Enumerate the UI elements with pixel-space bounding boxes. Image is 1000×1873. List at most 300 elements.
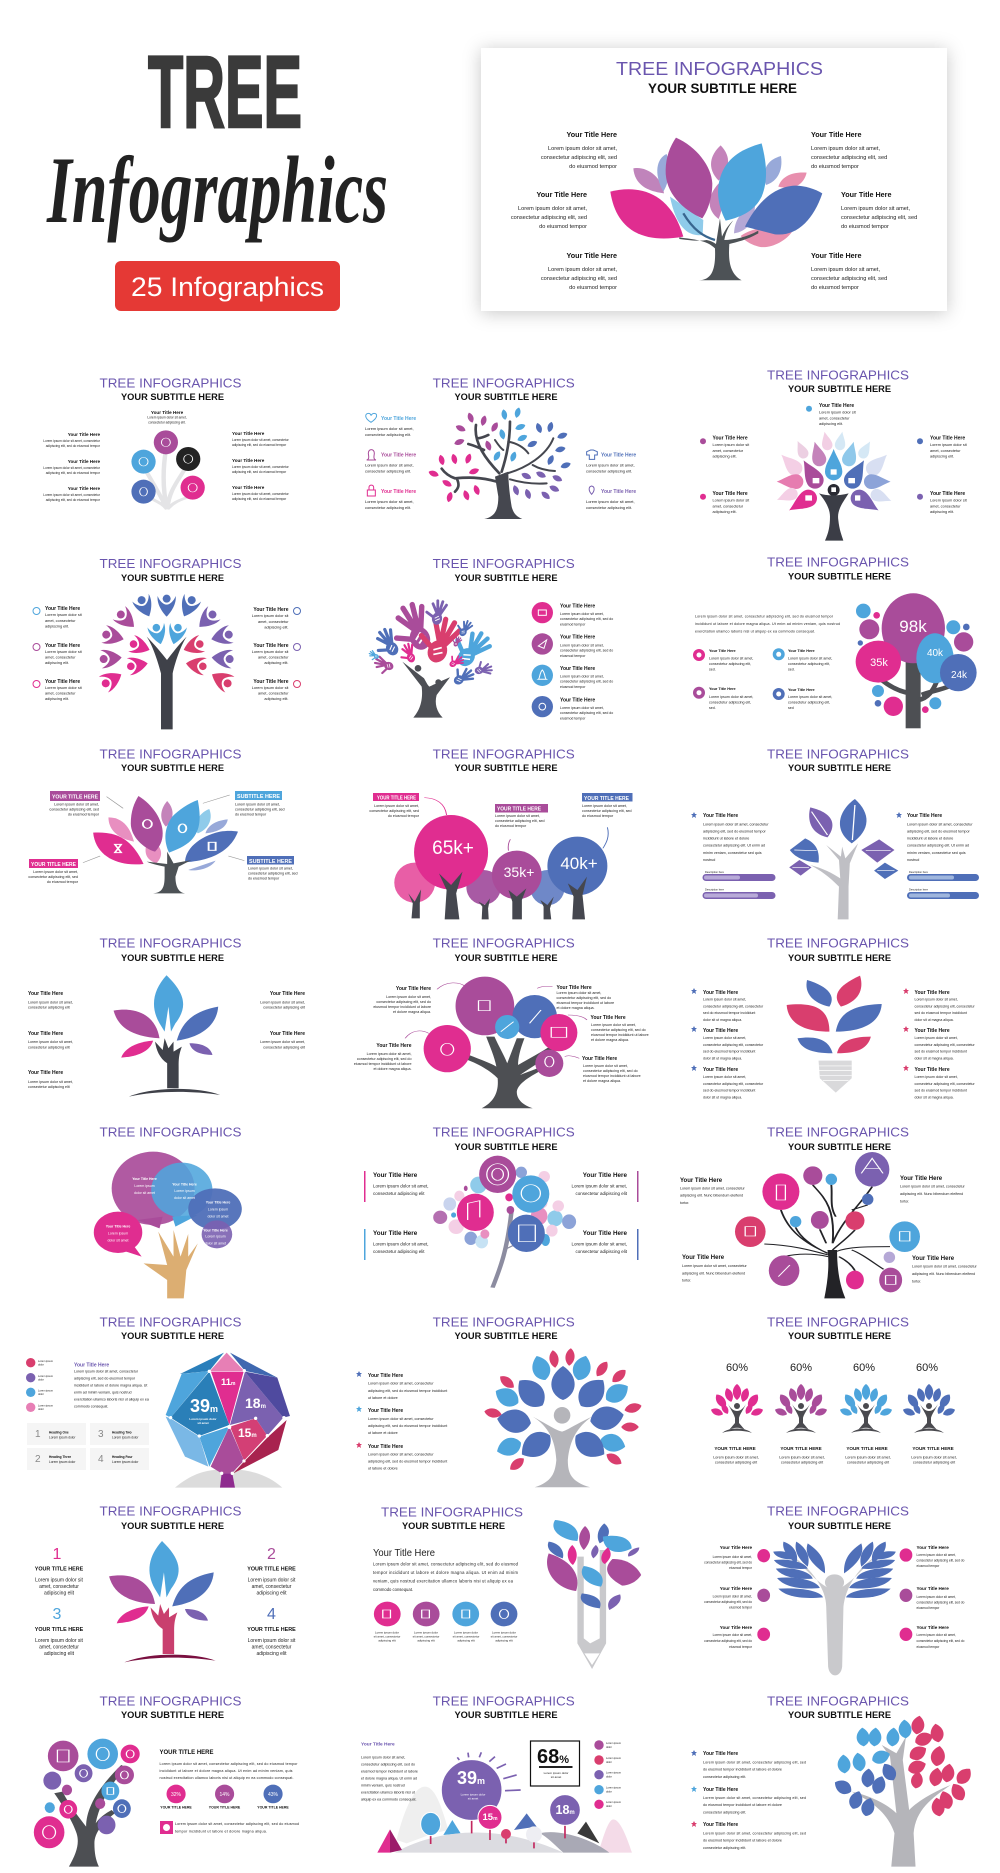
text: Your Title Here (914, 990, 950, 996)
dots (700, 406, 923, 500)
text: eiusmod tempor (916, 1564, 940, 1568)
text: consectetur adipiscing elit (28, 1085, 70, 1089)
text: Your Title Here (916, 1545, 949, 1550)
text: consectetur adipiscing elit. (703, 1846, 746, 1850)
text: Lorem ipsum dolor (492, 1630, 516, 1634)
panel: row 5 column 3 black tree (680, 1124, 978, 1298)
text: do eiusmod tempor (68, 812, 100, 816)
polygon tree (166, 1353, 290, 1488)
tree (832, 1715, 975, 1867)
panel: row 8 column 3 gray tree with petals: TREE INFOGRAPHICS (767, 1694, 909, 1708)
text: Lorem ipsum dolor sit (252, 686, 289, 690)
featured text right: Your Title Here (811, 130, 861, 139)
labels: YOUR TITLE HERE (31, 862, 76, 868)
text: Your Title Here (703, 1751, 738, 1757)
balloons (131, 430, 205, 509)
text block: consectetur adipiscing elit, sed do (361, 1762, 415, 1766)
text: YOUR TITLE HERE (35, 1566, 84, 1572)
text: amet, consectetur (39, 1584, 79, 1590)
text: et dolore magna aliqua. (393, 1010, 431, 1014)
panel: row 1 column 1 balloon tree (43, 376, 290, 509)
text: adipiscing elit, sed do eiusmod tempor (703, 830, 766, 834)
text: tortor. (900, 1200, 909, 1204)
panel: row 2 column 2 hand tree (367, 556, 613, 720)
landscape values: Lorem ipsum dolor (461, 1792, 485, 1796)
text block: Lorem ipsum dolor sit amet, consectetur (74, 1370, 139, 1374)
text: Lorem ipsum dolor sit (45, 686, 83, 690)
text: Lorem ipsum dolor sit amet, consectetur (43, 466, 101, 470)
text: consectetur adipiscing elit (263, 1006, 305, 1010)
panel: row 6 column 2 figure tree (356, 1315, 643, 1487)
panel: row 1 column 1 balloon tree: TREE INFOGRAPHICS (100, 376, 242, 390)
text: Lorem ipsum dolor sit amet, (713, 1633, 752, 1637)
text: adipiscing elit (44, 1651, 75, 1657)
panel: row 3 column 3 veined leaves: TREE INFOGRAPHICS (767, 746, 909, 762)
text: Lorem ipsum dolor (454, 1630, 478, 1634)
text: Your Title Here (930, 491, 965, 497)
text: Lorem ipsum dolor (414, 1630, 438, 1634)
text: YOUR TITLE HERE (780, 1446, 822, 1451)
text: Lorem ipsum dolor sit amet, (560, 674, 604, 678)
legend: dolor (606, 1804, 612, 1808)
text: Lorem ipsum dolor sit amet, (28, 1000, 73, 1004)
bubble values: 35k (870, 657, 888, 669)
text (28, 991, 305, 1089)
text: adipiscing elit, sed do eiusmod tempor (46, 498, 101, 502)
text: adipiscing elit, sed do eiusmod tempor (232, 470, 287, 474)
panel: row 6 column 2 figure tree: YOUR SUBTITLE HERE (454, 1331, 558, 1342)
bubble text: Lorem ipsum (205, 1234, 226, 1238)
stars (356, 1371, 362, 1448)
text: Lorem ipsum dolor sit (712, 443, 750, 447)
text: sed do eiusmod tempor incididunt (703, 1050, 755, 1054)
featured text left (511, 130, 617, 291)
text: Lorem ipsum dolor sit (819, 410, 857, 414)
text: consectetur adipiscing elit, sed do (704, 1639, 752, 1643)
text (28, 802, 298, 884)
text: dolor sit ut magna aliqua. (914, 1018, 954, 1022)
featured text left: Lorem ipsum dolor sit amet, (548, 267, 617, 273)
text: adipiscing elit. Nunc bibendum eleifend (912, 1272, 975, 1276)
panel: row 6 column 1 polygon tree (26, 1315, 290, 1488)
text: consectetur adipiscing elit. Ut enim ad (703, 844, 765, 848)
text: veniam, quis nostrud exercitation ullamco laboris nisi ut aliquip ex ea (373, 1578, 514, 1584)
text: sed do eiusmod tempor incididunt (703, 1088, 755, 1092)
legend: Lorem ipsum (606, 1756, 621, 1760)
text: adipiscing elit, sed do eiusmod tempor (907, 830, 970, 834)
text: adipiscing elit. (930, 454, 954, 458)
panel: row 3 column 1 labelled leaves (28, 746, 298, 893)
heading cards: 1 (35, 1429, 41, 1440)
heading: Infographics script: Infographics (46, 137, 388, 243)
panel: row 5 column 1 speech bubbles: TREE INFOGRAPHICS (100, 1124, 242, 1140)
panel: row 2 column 3 bubble tree (693, 555, 977, 728)
tree with bubbles (856, 593, 977, 728)
panel: row 6 column 3 four mini trees (710, 1315, 957, 1464)
text: ut labore et dolore (368, 1396, 398, 1400)
text: eiusmod tempor incididunt ut labore (354, 1062, 412, 1066)
legend: Lorem ipsum (38, 1359, 53, 1363)
text block: adipiscing elit, sed do eiusmod tempor (74, 1376, 136, 1380)
text: amet, consectetur (930, 449, 961, 453)
landscape values: 39m (457, 1768, 485, 1788)
bubble values (870, 617, 968, 681)
text: do eiusmod tempor incididunt ut labore et dolore (703, 1838, 782, 1842)
text: Your Title Here (381, 416, 416, 422)
panel: row 8 column 1 icon branches: TREE INFOGRAPHICS (100, 1694, 242, 1708)
text (703, 813, 973, 892)
text: eiusmod tempor (560, 716, 586, 720)
text: Lorem ipsum dolor sit amet, consectetur adipiscing elit, sed (703, 1760, 806, 1764)
bubble text (106, 1177, 230, 1246)
text: consectetur adipiscing elit (263, 1046, 305, 1050)
text: consectetur adipiscing elit, consectetur (914, 1082, 975, 1086)
text: tempor incididunt ut labore et dolore magna aliqua. Ut enim ad minim (373, 1570, 518, 1575)
stat box 68% (530, 1741, 580, 1786)
bubble text: dolor sit amet (205, 1242, 226, 1246)
text (369, 804, 632, 828)
text: do eiusmod tempor (235, 812, 267, 816)
text: Lorem ipsum dolor sit amet, (713, 1594, 752, 1598)
text: nostrud (907, 858, 919, 862)
text: consectetur adipiscing elit, sed (235, 808, 285, 812)
legend: dolor (38, 1378, 44, 1382)
footer note (160, 1821, 299, 1834)
panel: row 7 column 2 pencil tree: TREE INFOGRAPHICS (381, 1504, 523, 1520)
legend: dolor (606, 1760, 612, 1764)
icon list (532, 602, 553, 717)
text: Your Title Here (601, 452, 636, 458)
bubble text: Your Title Here (203, 1228, 228, 1232)
heading cards: 3 (98, 1429, 104, 1440)
tree (98, 593, 236, 729)
text: eiusmod tempor incididunt ut labore (591, 1033, 649, 1037)
text (680, 1176, 978, 1284)
badge: 25 Infographics (115, 261, 340, 311)
text: Lorem ipsum dolor (375, 1630, 399, 1634)
text: adipiscing elit. (264, 697, 288, 701)
text (35, 1566, 296, 1657)
text: sed (788, 706, 794, 710)
labels (29, 791, 294, 868)
text: Your Title Here (253, 679, 289, 685)
text: Lorem ipsum dolor sit amet, (373, 1242, 429, 1246)
heading cards: Heading One (49, 1430, 69, 1434)
legend: dolor (606, 1774, 612, 1778)
text block: exercitation ullamco laboris nisi ut (361, 1790, 415, 1794)
text: Lorem ipsum dolor sit amet, (713, 1456, 759, 1460)
panel: row 8 column 3 gray tree with petals (691, 1694, 975, 1867)
tree (405, 977, 587, 1108)
featured text right: Lorem ipsum dolor sit amet, (811, 267, 880, 273)
percent labels: 60% (790, 1362, 812, 1374)
text: do eiusmod tempor incididunt ut labore et dolore (703, 1803, 782, 1807)
bubble values: 24k (951, 670, 968, 681)
text: Lorem ipsum dolor sit (248, 1638, 296, 1644)
text block: et dolore magna aliqua. Ut enim ad (361, 1776, 417, 1780)
text: amet, consectetur (258, 656, 289, 660)
text: Your Title Here (709, 687, 736, 691)
text: eiusmod tempor (560, 654, 586, 658)
text: Your Title Here (373, 1547, 435, 1559)
featured text right: Lorem ipsum dolor sit amet, (811, 146, 880, 152)
text: Lorem ipsum dolor sit amet, (260, 1040, 305, 1044)
text: do eiusmod tempor (47, 880, 79, 884)
text: consectetur adipiscing elit (373, 1191, 425, 1196)
labels (373, 793, 632, 812)
panel: row 5 column 2 bubble crown: TREE INFOGRAPHICS (433, 1124, 575, 1140)
panel: row 4 column 2 icon tree (354, 936, 649, 1108)
text: Lorem ipsum dolor sit amet, (788, 695, 832, 699)
text: Lorem ipsum dolor sit amet, (571, 1184, 627, 1188)
text: Your Title Here (788, 649, 815, 653)
text: Your Title Here (583, 1172, 627, 1179)
panel: row 8 column 2 landscape stats (361, 1694, 632, 1853)
text: Lorem ipsum dolor sit amet, (365, 499, 414, 504)
text: eiusmod tempor (560, 685, 586, 689)
text: Lorem ipsum dolor sit amet, (916, 1553, 956, 1557)
panel: row 1 column 2 leafy tree (365, 376, 636, 519)
tree (433, 1156, 576, 1288)
blobs (374, 1602, 517, 1626)
text block: YOUR TITLE HERE (160, 1750, 214, 1756)
text: Lorem ipsum dolor sit amet, (374, 804, 419, 808)
text: adipiscing elit, sed do eiusmod tempor (46, 444, 101, 448)
text: consectetur adipiscing elit. (586, 505, 632, 510)
text (368, 1373, 447, 1470)
text: YOUR TITLE HERE (912, 1446, 954, 1451)
text: tortor. (680, 1201, 689, 1205)
tree (735, 1152, 920, 1298)
text: amet, consectetur (930, 504, 961, 508)
text: consectetur adipiscing elit. (586, 468, 632, 474)
panel: row 3 column 2 forest values (369, 746, 632, 919)
panel: row 5 column 3 black tree: TREE INFOGRAPHICS (767, 1124, 909, 1140)
text: Lorem ipsum dolor sit amet, consectetur adipiscing elit, sed (703, 1796, 806, 1800)
text: consectetur adipiscing elit, (709, 700, 751, 704)
text: consectetur adipiscing elit, (709, 662, 751, 666)
outline icons (366, 413, 597, 496)
text: adipiscing elit. (712, 454, 737, 458)
text: YOUR TITLE HERE (247, 1627, 296, 1633)
text: consectetur adipiscing elit, consectetur (703, 1004, 764, 1008)
text: consectetur adipiscing elit, sed do (583, 1069, 638, 1073)
text: Lorem ipsum dolor sit amet, consectetur (232, 492, 290, 496)
text: amet, consectetur (252, 1644, 292, 1650)
labels: YOUR TITLE HERE (497, 806, 541, 812)
text: adipiscing elit. Nunc bibendum eleifend (680, 1194, 743, 1198)
tree (428, 407, 572, 519)
panel: row 5 column 3 black tree: YOUR SUBTITLE HERE (788, 1142, 891, 1153)
text: Lorem ipsum dolor sit (35, 1578, 84, 1584)
labels: SUBTITLE HERE (249, 859, 292, 865)
bubble text: Your Title Here (132, 1177, 157, 1181)
text: sed do eiusmod tempor incididunt (914, 1050, 967, 1054)
text: dolor sit ut magna aliqua. (703, 1018, 742, 1022)
panel: row 3 column 2 forest values: TREE INFOGRAPHICS (433, 746, 575, 762)
text: Your Title Here (709, 649, 736, 653)
text: Your Title Here (68, 459, 100, 464)
labels: YOUR TITLE HERE (377, 796, 416, 802)
panel: row 7 column 1 numbered hand tree (35, 1504, 296, 1662)
text: Your Title Here (28, 991, 63, 997)
panel: row 4 column 1 hand leaves: YOUR SUBTITLE HERE (121, 953, 224, 964)
text: Lorem ipsum dolor sit amet, consectetur (43, 493, 101, 497)
text: do eiusmod tempor (388, 814, 420, 818)
trees (394, 798, 608, 919)
text: Your Title Here (582, 1056, 617, 1062)
text: Lorem ipsum dolor sit amet, (583, 1064, 628, 1068)
text: consectetur adipiscing elit. (703, 1810, 746, 1814)
panel: row 7 column 3 person tree: TREE INFOGRAPHICS (767, 1504, 909, 1518)
bubble text: Your Title Here (106, 1224, 130, 1228)
legend: Lorem ipsum (606, 1800, 621, 1804)
text (43, 410, 290, 502)
text: Your Title Here (703, 990, 738, 996)
text: consectetur adipiscing elit, (788, 662, 830, 666)
featured text left: Lorem ipsum dolor sit amet, (548, 146, 617, 152)
text: Lorem ipsum dolor sit amet, (703, 1075, 746, 1079)
text: Description here (909, 888, 928, 892)
featured text right: consectetur adipiscing elit, sed (811, 276, 887, 282)
text: Lorem ipsum dolor sit amet, (560, 706, 604, 710)
text: sed do eiusmod tempor incididunt (914, 1011, 967, 1015)
text: eiusmod tempor incididunt ut labore (583, 1074, 641, 1078)
text: amet, consectetur (258, 620, 289, 624)
text: consectetur adipiscing elit, sed (248, 872, 298, 876)
percent labels: 60% (853, 1362, 875, 1374)
panel: row 8 column 1 icon branches: YOUR SUBTITLE HERE (121, 1710, 224, 1721)
landscape values: 18m (556, 1803, 575, 1817)
text: consectetur adipiscing elit, sed do (916, 1639, 965, 1643)
text: amet, consectetur (45, 692, 76, 696)
legend: Lorem ipsum (606, 1786, 621, 1790)
text block: exercitation ullamco laboris nisi ut aliquip ex ea (74, 1398, 149, 1402)
text: Your Title Here (560, 604, 595, 610)
text: Lorem ipsum dolor sit amet, (591, 1023, 636, 1027)
text: consectetur adipiscing elit, (788, 700, 830, 704)
text: Lorem ipsum dolor sit amet, (586, 462, 635, 468)
text block: commodo consequat. (74, 1404, 108, 1408)
text: Your Title Here (720, 1586, 752, 1591)
panel: row 6 column 3 four mini trees: TREE INFOGRAPHICS (767, 1315, 909, 1330)
landscape (377, 1752, 632, 1853)
panel: row 1 column 2 leafy tree: TREE INFOGRAPHICS (433, 376, 575, 390)
featured text right: Lorem ipsum dolor sit amet, (841, 206, 910, 212)
panel: featured slide (481, 48, 947, 311)
footer note: tempor incididunt ut labore et dolore magna aliqua. (175, 1830, 267, 1834)
text: Lorem ipsum dolor sit amet, consectetur adipiscing elit, sed (703, 1832, 806, 1836)
legend: Lorem ipsum (606, 1770, 621, 1774)
featured text right: do eiusmod tempor (811, 164, 859, 170)
text: Your Title Here (703, 1822, 738, 1828)
featured text right: Your Title Here (811, 251, 861, 260)
text: Your Title Here (914, 1067, 950, 1073)
panel: row 6 column 1 polygon tree: TREE INFOGRAPHICS (100, 1315, 242, 1330)
panel: row 1 column 3 droplet tree: TREE INFOGRAPHICS (767, 368, 909, 382)
featured text left: do eiusmod tempor (569, 285, 617, 291)
text: do eiusmod tempor (495, 824, 527, 828)
featured text left: consectetur adipiscing elit, sed (511, 215, 587, 221)
text: consectetur adipiscing elit. (365, 505, 411, 510)
text: adipiscing elit. (45, 624, 69, 628)
text: incididunt ut labore et dolore (907, 836, 953, 840)
panel: row 2 column 1 people tree: TREE INFOGRAPHICS (100, 556, 242, 571)
text: Lorem ipsum dolor sit amet, (586, 499, 635, 504)
text: consectetur adipiscing elit, sed (28, 875, 78, 879)
text: Lorem ipsum dolor sit amet, consectetur (368, 1382, 434, 1386)
text: Lorem ipsum dolor sit amet, (916, 1595, 956, 1599)
percent values: YOUR TITLE HERE (160, 1806, 192, 1810)
text: adipiscing elit. (264, 661, 288, 665)
text: do eiusmod tempor (582, 814, 614, 818)
progress bars (702, 874, 979, 899)
text: Lorem ipsum dolor sit amet, (54, 802, 99, 806)
text: consectetur adipiscing elit. Ut enim ad (907, 844, 969, 848)
stars (691, 1750, 697, 1827)
text: consectetur adipiscing elit. (703, 1775, 746, 1779)
text: consectetur adipiscing elit, sed do (357, 1057, 412, 1061)
text: consectetur adipiscing elit (847, 1460, 889, 1464)
tree (34, 1739, 140, 1867)
text: Lorem ipsum dolor sit amet, (582, 804, 627, 808)
text: Your Title Here (28, 1070, 63, 1076)
text (703, 1751, 806, 1850)
text (713, 1446, 957, 1464)
text: Your Title Here (232, 431, 265, 436)
text block: Lorem ipsum dolor sit amet, (361, 1756, 405, 1760)
text: Lorem ipsum dolor sit amet, consectetur (703, 822, 769, 826)
text: Lorem ipsum dolor sit amet, (703, 998, 746, 1002)
text: Your Title Here (381, 452, 416, 458)
featured text right: consectetur adipiscing elit, sed (811, 155, 887, 161)
numbers: 3 (53, 1606, 62, 1623)
text block: Lorem ipsum dolor sit amet, consectetur adipiscing elit, sed do eiusmod tempor (160, 1762, 298, 1766)
text: sit amet, consectetur (413, 1634, 439, 1638)
text: Your Title Here (556, 985, 592, 991)
panel: row 7 column 1 numbered hand tree: YOUR SUBTITLE HERE (121, 1521, 224, 1532)
featured text left: consectetur adipiscing elit, sed (541, 155, 617, 161)
panel: row 3 column 1 labelled leaves: TREE INFOGRAPHICS (100, 746, 242, 762)
panel: row 3 column 3 veined leaves (691, 746, 979, 919)
bubble text: Lorem ipsum (108, 1232, 128, 1236)
text: ut labore et dolore (368, 1466, 398, 1470)
values: sit amet (197, 1421, 209, 1425)
heading: TREE: TREE (148, 35, 302, 149)
percent values: 14% (219, 1792, 230, 1798)
panel: row 5 column 2 bubble crown (364, 1124, 638, 1288)
stat box 68%: Lorem ipsum dolor (544, 1771, 568, 1775)
text: Lorem ipsum dolor sit amet, consectetur (907, 822, 973, 826)
text: Your Title Here (68, 432, 100, 437)
text: consectetur adipiscing elit, sed do (560, 648, 613, 652)
text: Your Title Here (720, 1625, 752, 1630)
panel: row 2 column 3 bubble tree: TREE INFOGRAPHICS (767, 555, 909, 570)
text: consectetur adipiscing elit, consectetur (703, 1082, 764, 1086)
text: amet, consectetur (712, 504, 744, 508)
text: Your Title Here (373, 1230, 418, 1237)
panel: row 2 column 1 people tree (33, 556, 300, 729)
text: eiusmod tempor (729, 1566, 753, 1570)
text: consectetur adipiscing elit, sed do (556, 996, 611, 1000)
text: Lorem ipsum dolor sit amet, (260, 1000, 305, 1004)
featured text right: Your Title Here (841, 190, 891, 199)
text: adipiscing elit. (264, 626, 288, 630)
panel: row 7 column 3 person tree: YOUR SUBTITLE HERE (788, 1521, 891, 1532)
legend: Lorem ipsum (38, 1388, 53, 1392)
text block (160, 1750, 298, 1780)
panel: row 4 column 3 light bulb leaves (691, 936, 975, 1100)
